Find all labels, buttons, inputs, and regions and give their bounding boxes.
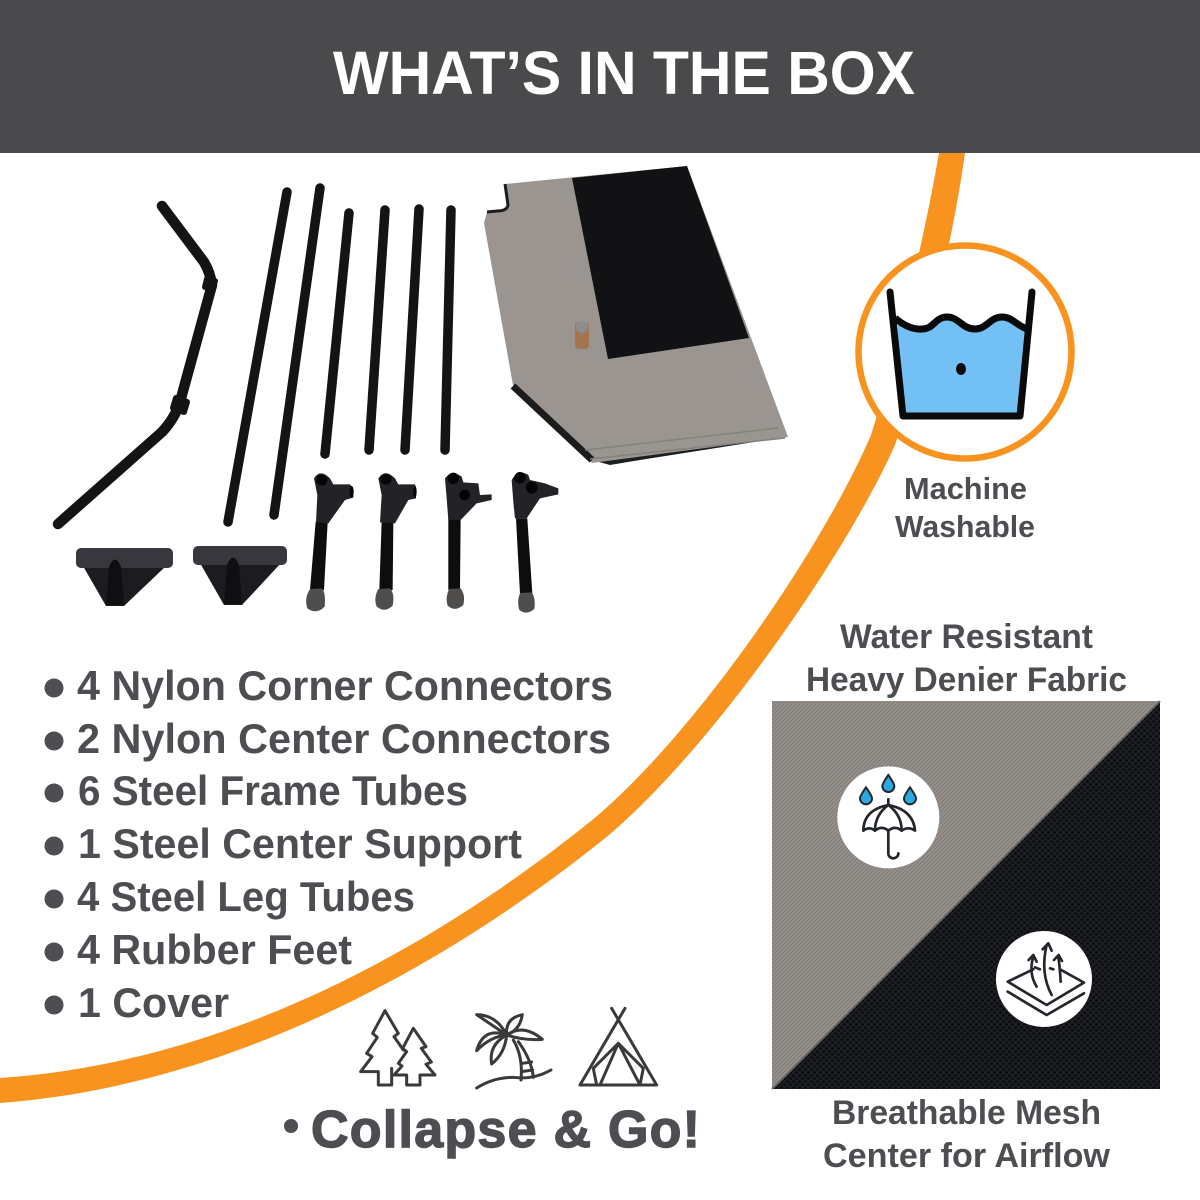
water resistant heading: Heavy Denier Fabric: [806, 661, 1127, 699]
water resistant heading: [806, 618, 1127, 699]
header band: [0, 0, 1200, 153]
list item: 4 Nylon Corner Connectors: [77, 662, 613, 709]
parts list: [44, 662, 613, 1026]
leg tubes with connectors and rubber feet: [306, 472, 558, 613]
orange curved swoosh: [0, 153, 965, 1103]
folded cover: [484, 166, 788, 465]
icon: breathable layers: [996, 931, 1092, 1027]
machine washable label: [895, 471, 1035, 544]
list item: 4 Rubber Feet: [77, 926, 352, 973]
corner connectors: [76, 546, 287, 606]
breathable mesh caption: Center for Airflow: [823, 1137, 1111, 1175]
icon: umbrella with rain: [837, 766, 939, 868]
list item: 2 Nylon Center Connectors: [77, 715, 611, 762]
product parts photo: [58, 166, 788, 613]
water resistant heading: Water Resistant: [840, 618, 1093, 656]
frame tubes: [228, 188, 451, 522]
title: WHAT’S IN THE BOX: [333, 39, 915, 107]
collapse and go tagline: Collapse & Go!: [311, 1101, 700, 1159]
list item: 1 Cover: [78, 979, 229, 1026]
icon: teepee tent: [580, 1008, 657, 1085]
icon: palm tree: [477, 1015, 551, 1088]
fabric swatch: [772, 701, 1160, 1089]
bent center support tube: [58, 206, 215, 524]
list item: 6 Steel Frame Tubes: [78, 767, 468, 814]
breathable mesh caption: Breathable Mesh: [832, 1094, 1101, 1132]
breathable mesh caption: [823, 1094, 1111, 1175]
list item: 4 Steel Leg Tubes: [77, 873, 415, 920]
machine washable badge: [858, 246, 1072, 458]
machine washable label: Washable: [895, 509, 1035, 544]
list item: 1 Steel Center Support: [78, 820, 522, 867]
icon: wash tub: [890, 292, 1032, 416]
machine washable label: Machine: [904, 471, 1027, 506]
icon: pine trees: [361, 1011, 435, 1085]
